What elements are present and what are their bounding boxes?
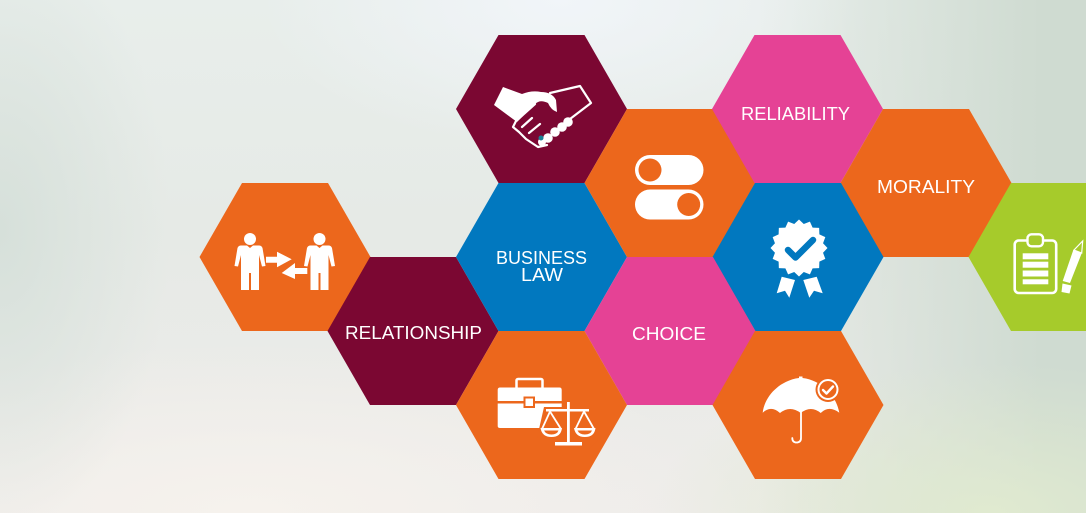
hexagon: morality: [840, 109, 1012, 257]
label: choice: CHOICE: [632, 324, 706, 344]
icon: clipboard and pencil: [1015, 234, 1083, 294]
hexagon: people exchange: [200, 183, 370, 331]
hexagon: relationship: [328, 257, 498, 405]
label: reliability: RELIABILITY: [741, 104, 850, 124]
hexagon: handshake: [456, 35, 627, 183]
label: business law: LAW: [521, 265, 563, 285]
icon: handshake: [494, 86, 591, 147]
hexagon: toggles: [584, 109, 756, 257]
label: morality: MORALITY: [877, 177, 975, 197]
icon: umbrella with check: [763, 376, 840, 442]
hexagon: reliability: [712, 35, 883, 183]
icon: toggle switches: [635, 155, 704, 220]
hexagon: choice: [584, 257, 756, 405]
hexagon: umbrella: [712, 331, 884, 479]
hexagon: award badge: [712, 183, 884, 331]
icon: briefcase and scales: [498, 379, 598, 450]
hexagon: business law: [456, 183, 627, 331]
hexagon: clipboard: [968, 183, 1086, 331]
label: business law: BUSINESS: [496, 248, 587, 268]
icon: two people with arrows: [234, 233, 335, 290]
label: business law: [496, 248, 587, 285]
label: relationship: RELATIONSHIP: [345, 323, 482, 343]
icon: award rosette: [770, 220, 828, 298]
hexagon: briefcase and scales: [456, 331, 627, 479]
